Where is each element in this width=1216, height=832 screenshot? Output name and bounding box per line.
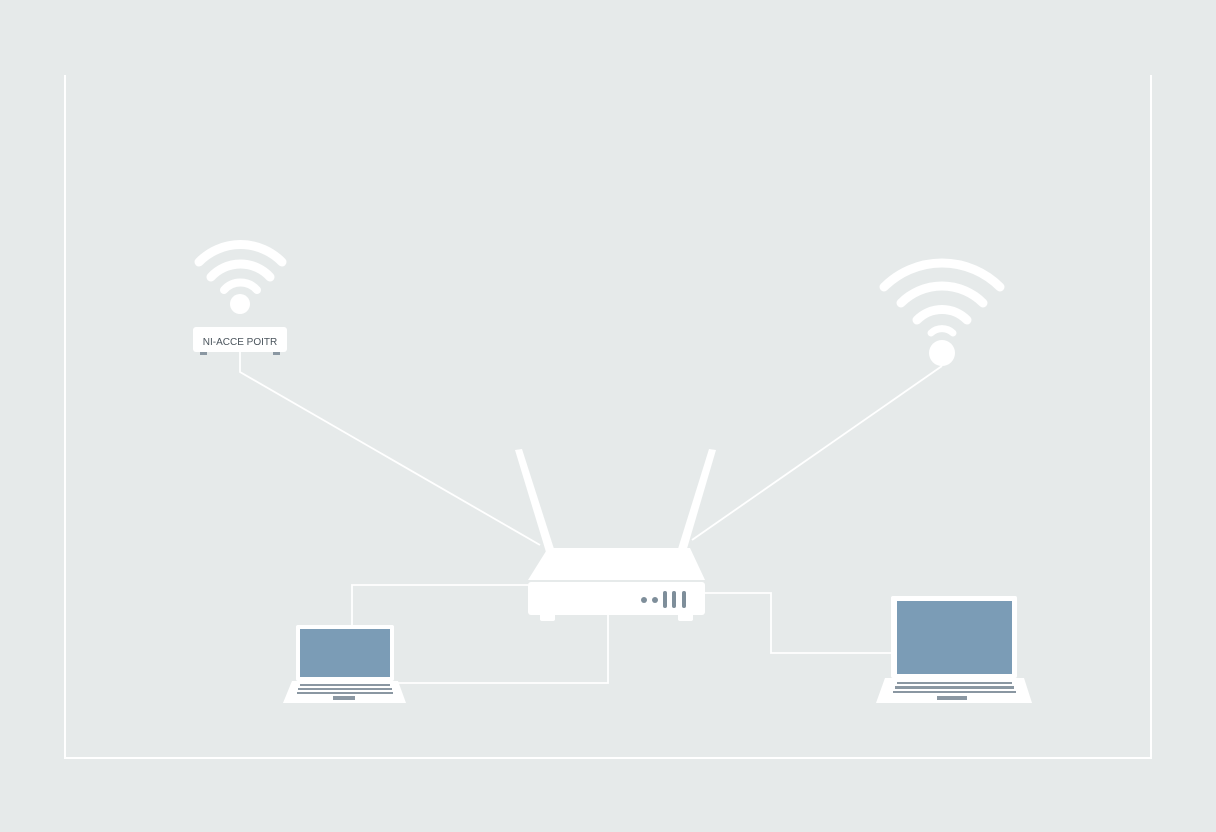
icon: router (515, 449, 716, 621)
access point box: NI-ACCE POITR (203, 337, 277, 348)
icon: left wifi access point (193, 245, 287, 355)
connection lines (240, 352, 942, 683)
frame (65, 75, 1151, 758)
icon: right wifi (884, 263, 1000, 366)
icon: left laptop (283, 625, 406, 703)
icon: right laptop (876, 596, 1032, 703)
